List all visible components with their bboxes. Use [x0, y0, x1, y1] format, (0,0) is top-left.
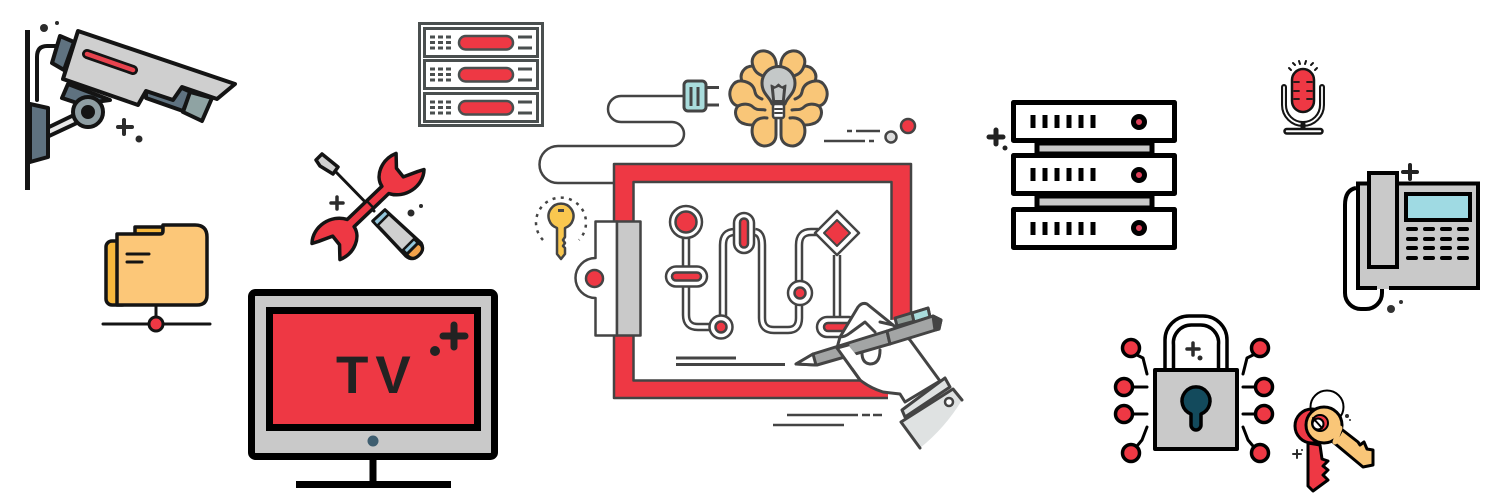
decorative motion dots top [824, 119, 915, 142]
icon: brain with light bulb [730, 51, 827, 146]
icon: server stack large [989, 102, 1174, 248]
light bulb [762, 66, 795, 118]
flowchart [666, 206, 859, 338]
TV label: TV [336, 346, 418, 405]
icon: padlock with circuit nodes [1116, 316, 1272, 462]
brain left half [730, 51, 776, 146]
icon: golden key with halo [536, 198, 586, 259]
clipboard clip [576, 222, 640, 336]
icon: security camera [28, 21, 235, 190]
rack unit 3 [424, 94, 538, 122]
icon: pair of keys on ring [1293, 390, 1373, 491]
icon: desk telephone [1345, 165, 1479, 313]
icon: rack server small [420, 24, 542, 126]
shirt cuff and sleeve [901, 378, 962, 448]
hand holding pen [796, 303, 962, 448]
icon: network folder [103, 225, 210, 331]
motion lines bottom [773, 415, 882, 425]
icon: television [252, 292, 494, 488]
brain right half [781, 51, 827, 146]
icon: power plug and cable [540, 81, 719, 183]
pen [796, 308, 941, 365]
icon: crossed wrench and screwdriver [306, 146, 430, 267]
rack unit 1 [424, 28, 538, 56]
clipboard [576, 164, 911, 398]
rack unit 2 [424, 60, 538, 88]
icon: microphone [1284, 61, 1322, 134]
